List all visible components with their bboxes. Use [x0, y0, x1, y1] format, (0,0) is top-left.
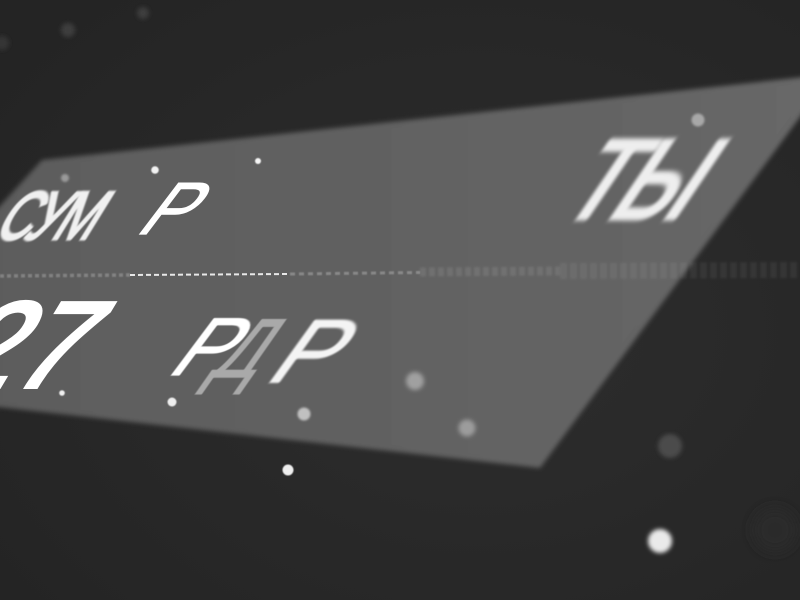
dashed scan line [0, 270, 800, 276]
letter: Д grey: Д [194, 302, 305, 395]
angled panel [0, 74, 800, 468]
label: ТЫ: ТЫ [539, 118, 745, 243]
letter: Р first: Р [152, 301, 275, 393]
letter: Р: Р [122, 168, 231, 250]
letter: Р second: Р [249, 301, 383, 401]
